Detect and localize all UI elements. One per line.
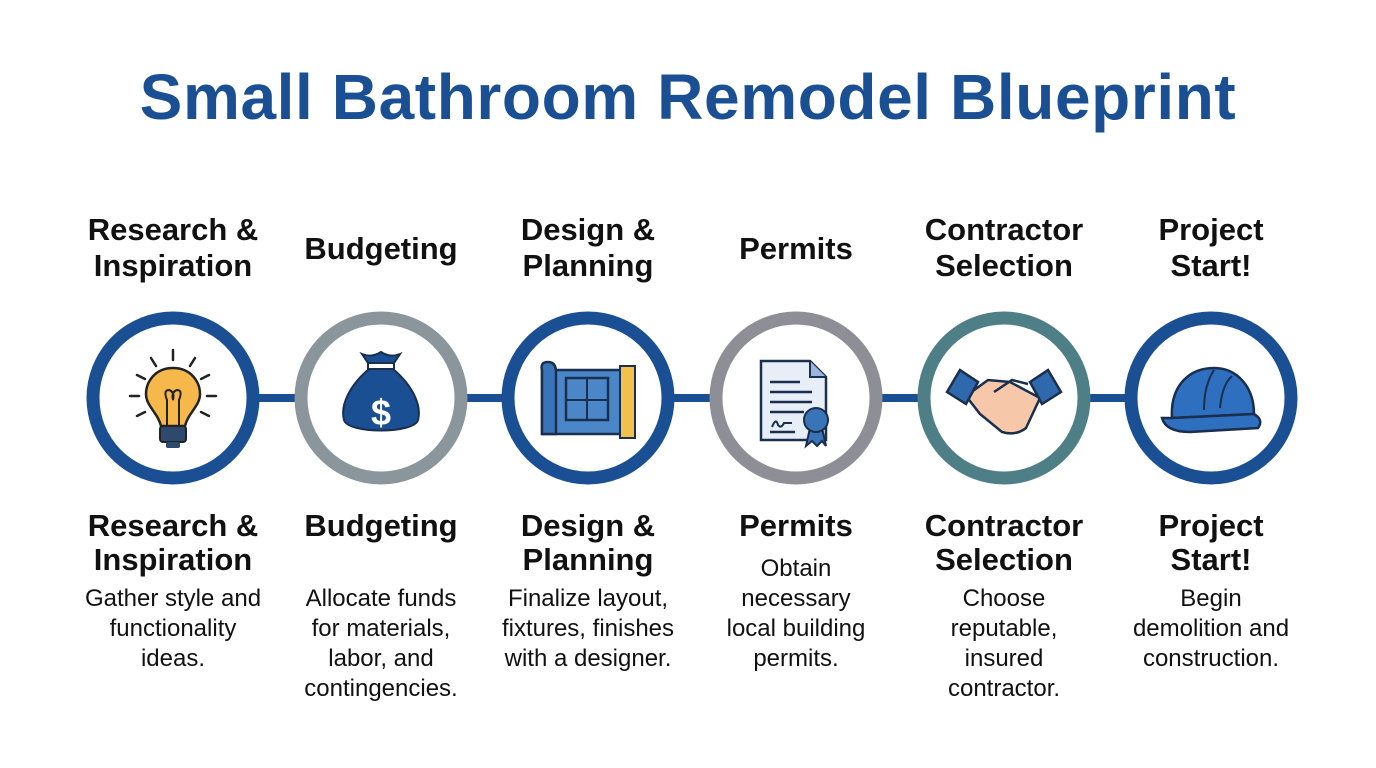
heading bbox=[88, 508, 258, 577]
top heading: design: Design & bbox=[521, 212, 655, 247]
top heading: project start: Start! bbox=[1171, 248, 1251, 283]
description: demolition and bbox=[1133, 615, 1289, 642]
heading bbox=[1158, 508, 1264, 577]
top heading: research bbox=[88, 212, 258, 283]
description bbox=[304, 585, 458, 702]
description: Gather style and bbox=[85, 585, 261, 612]
description bbox=[502, 585, 674, 672]
step 6 circle: hard hat bbox=[1131, 318, 1291, 478]
top heading: budgeting: Budgeting bbox=[304, 231, 458, 266]
step 3 text bbox=[502, 508, 674, 672]
description bbox=[85, 585, 261, 672]
title: Small Bathroom Remodel Blueprint bbox=[140, 61, 1236, 133]
step 5 text bbox=[925, 508, 1083, 702]
heading: Permits bbox=[739, 508, 853, 543]
step 6 text bbox=[1133, 508, 1289, 672]
description: with a designer. bbox=[505, 645, 671, 672]
description: necessary bbox=[741, 585, 851, 612]
top heading: permits: Permits bbox=[739, 231, 853, 266]
heading: Selection bbox=[935, 542, 1073, 577]
description: Choose bbox=[963, 585, 1045, 612]
heading: Planning bbox=[523, 542, 653, 577]
heading bbox=[521, 508, 655, 577]
description: labor, and bbox=[328, 645, 434, 672]
description bbox=[1133, 585, 1289, 672]
heading: Research & bbox=[88, 508, 258, 543]
step 2 circle: money bag: $ bbox=[371, 392, 391, 433]
description: contingencies. bbox=[304, 675, 458, 702]
top heading: research: Research & bbox=[88, 212, 258, 247]
description: insured bbox=[965, 645, 1043, 672]
top heading: contractor: Selection bbox=[935, 248, 1073, 283]
step 4 text bbox=[727, 508, 865, 672]
description: permits. bbox=[753, 645, 839, 672]
heading: Budgeting bbox=[304, 508, 458, 543]
heading: Project bbox=[1158, 508, 1264, 543]
description: for materials, bbox=[312, 615, 450, 642]
description: ideas. bbox=[141, 645, 205, 672]
heading: Inspiration bbox=[94, 542, 252, 577]
step 4 circle: permit document bbox=[716, 318, 876, 478]
step 3 circle: blueprint bbox=[508, 318, 668, 478]
top heading: contractor: Contractor bbox=[925, 212, 1083, 247]
step 5 circle: handshake bbox=[924, 318, 1084, 478]
description: Allocate funds bbox=[306, 585, 456, 612]
top heading: research: Inspiration bbox=[94, 248, 252, 283]
top heading: design: Planning bbox=[523, 248, 653, 283]
top heading: project start bbox=[1158, 212, 1264, 283]
step 2 text bbox=[304, 508, 458, 702]
description: Obtain bbox=[761, 555, 831, 582]
description: Finalize layout, bbox=[508, 585, 668, 612]
description: construction. bbox=[1143, 645, 1279, 672]
heading: Start! bbox=[1171, 542, 1251, 577]
heading: Design & bbox=[521, 508, 655, 543]
description bbox=[727, 555, 865, 672]
description: fixtures, finishes bbox=[502, 615, 674, 642]
description: reputable, bbox=[951, 615, 1057, 642]
description bbox=[948, 585, 1060, 702]
description: functionality bbox=[110, 615, 236, 642]
step 1 text bbox=[85, 508, 261, 672]
top heading: project start: Project bbox=[1158, 212, 1264, 247]
top heading: design bbox=[521, 212, 655, 283]
heading: Contractor bbox=[925, 508, 1083, 543]
description: contractor. bbox=[948, 675, 1060, 702]
connector line bbox=[173, 394, 1211, 402]
description: Begin bbox=[1180, 585, 1242, 612]
top heading: contractor bbox=[925, 212, 1083, 283]
heading bbox=[925, 508, 1083, 577]
step 1 circle: lightbulb bbox=[93, 318, 253, 478]
description: local building bbox=[727, 615, 865, 642]
step 2 circle: money bag bbox=[301, 318, 461, 478]
